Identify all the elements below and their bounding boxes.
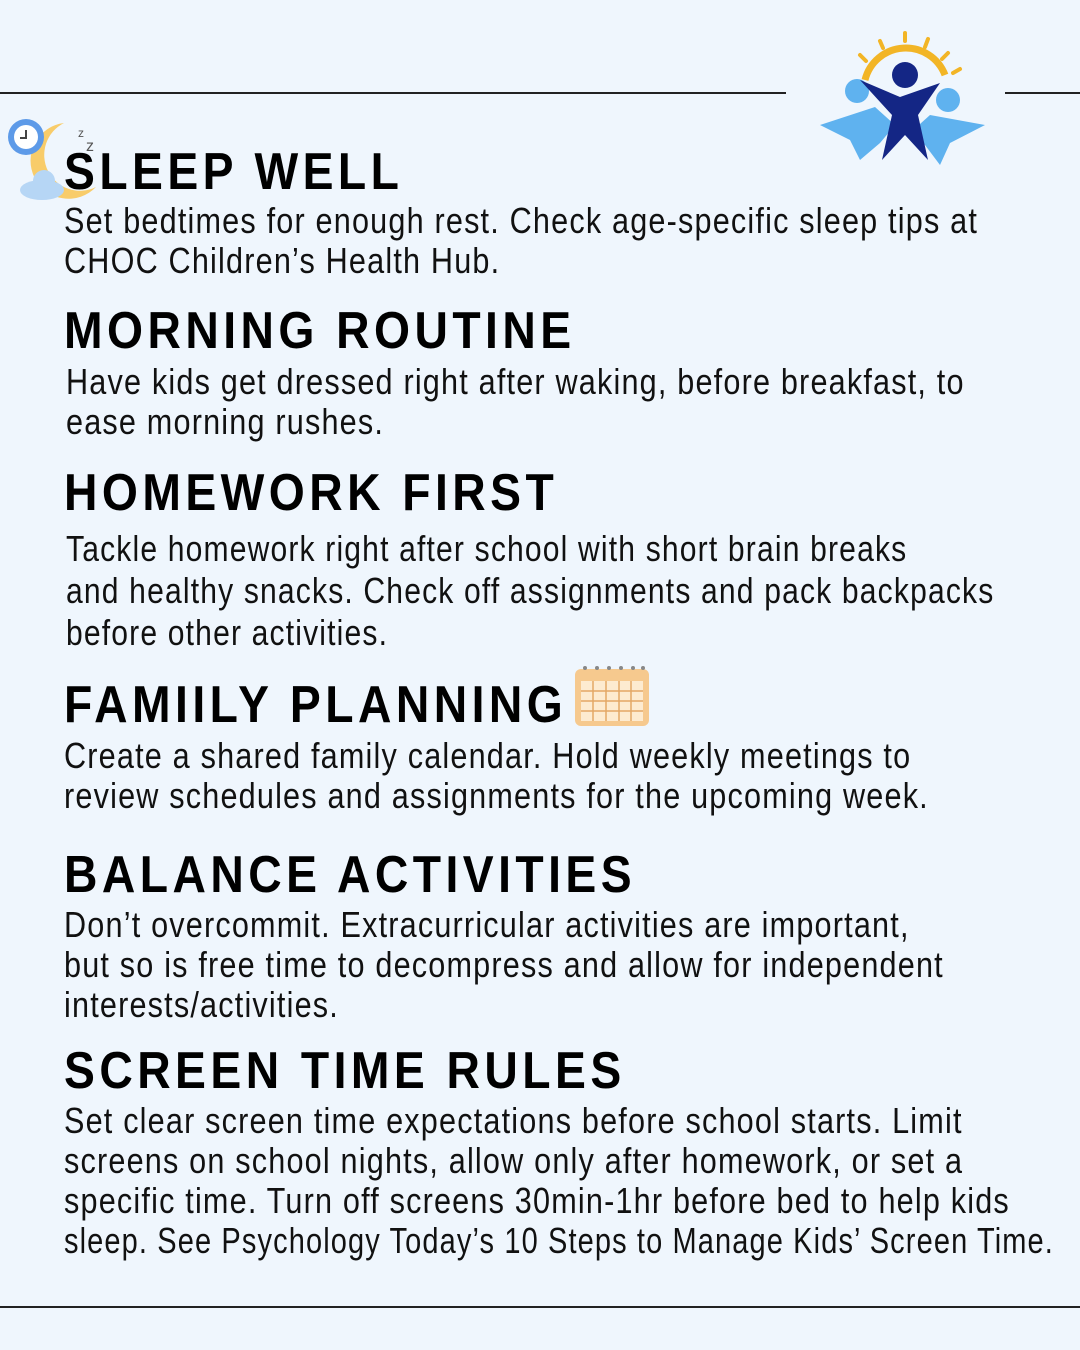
text: balance activities: interests/activities. — [64, 984, 339, 1025]
text: balance activities — [64, 904, 944, 1025]
text: balance activities: Don’t overcommit. Extracurricular activities are important, — [64, 904, 910, 945]
text: screen time rules: Set clear screen time expectations before school starts. Limit — [64, 1100, 963, 1141]
text: sleep well — [64, 200, 978, 281]
icon: moon clock clouds — [8, 119, 96, 200]
heading: balance activities: BALANCE ACTIVITIES — [64, 846, 636, 904]
text: balance activities: but so is free time to decompress and allow for independent — [64, 944, 944, 985]
text: screen time rules: screens on school nights, allow only after homework, or set a — [64, 1140, 963, 1181]
text: morning routine: Have kids get dressed right after waking, before breakfast, to — [66, 361, 965, 402]
text: homework first — [66, 528, 994, 653]
text: sleep well: Set bedtimes for enough rest. Check age-specific sleep tips at — [64, 200, 978, 241]
logo: children with sun — [820, 31, 985, 165]
icon: moon clock clouds: z — [78, 126, 84, 140]
text: family planning: review schedules and assignments for the upcoming week. — [64, 775, 929, 816]
icon: moon clock clouds: z — [86, 138, 94, 155]
heading: morning routine: MORNING ROUTINE — [64, 302, 576, 360]
text: homework first: and healthy snacks. Check off assignments and pack backpacks — [66, 570, 994, 611]
text: sleep well: CHOC Children’s Health Hub. — [64, 240, 500, 281]
heading: sleep well: SLEEP WELL — [64, 143, 403, 201]
heading: family planning: FAMIILY PLANNING — [64, 676, 567, 734]
text: screen time rules — [64, 1100, 1010, 1221]
text: homework first: Tackle homework right after school with short brain breaks — [66, 528, 907, 569]
text: homework first: before other activities. — [66, 612, 388, 653]
heading: homework first: HOMEWORK FIRST — [64, 464, 558, 522]
text: family planning: Create a shared family calendar. Hold weekly meetings to — [64, 735, 911, 776]
heading: screen time rules: SCREEN TIME RULES — [64, 1042, 626, 1100]
text: morning routine: ease morning rushes. — [66, 401, 384, 442]
text: screen time rules last line: sleep. See Psychology Today’s 10 Steps to Manage Kids’ Screen Time. — [64, 1220, 1054, 1261]
text: family planning — [64, 735, 929, 816]
text: morning routine — [66, 361, 965, 442]
icon: calendar — [575, 666, 649, 726]
text: screen time rules: specific time. Turn off screens 30min-1hr before bed to help kids — [64, 1180, 1010, 1221]
